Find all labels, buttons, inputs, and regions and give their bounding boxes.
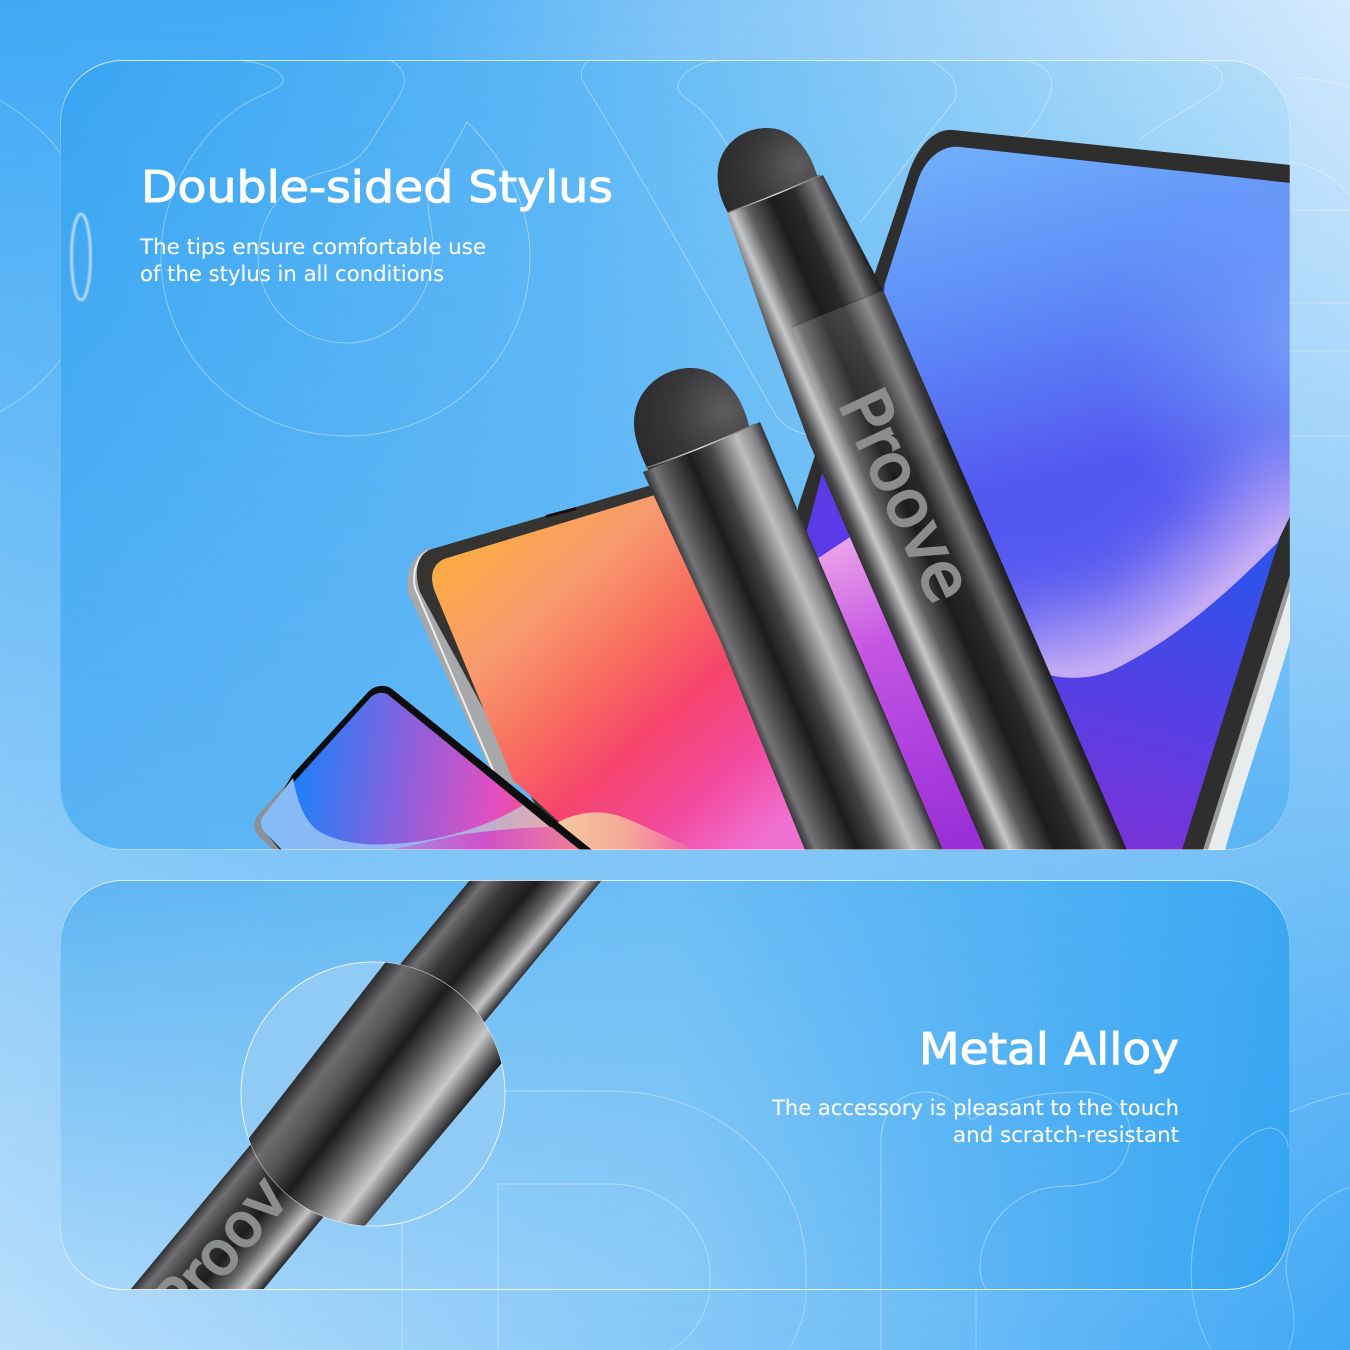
panel 1 background bbox=[60, 60, 1290, 850]
heading: metal alloy: Metal Alloy bbox=[919, 1024, 1179, 1075]
phone silver highlight bbox=[414, 551, 498, 782]
tablet silver edge bbox=[1203, 570, 1290, 850]
magnified shaft bbox=[180, 892, 590, 1303]
stylus front rim bbox=[729, 175, 820, 212]
description: accessory: and scratch-resistant bbox=[953, 1123, 1179, 1148]
small phone lower stripe bbox=[387, 827, 586, 850]
stylus rear tip bbox=[634, 368, 749, 470]
tablet screen left purple bbox=[806, 472, 850, 558]
phone screen bbox=[432, 495, 815, 850]
magnifier lens bbox=[180, 892, 590, 1303]
stylus rear body bbox=[643, 422, 943, 850]
lens glass bbox=[241, 962, 505, 1226]
shaft bbox=[130, 880, 602, 1290]
tablet frame bbox=[780, 130, 1290, 850]
small phone right bezel bbox=[386, 690, 592, 850]
phone frame bbox=[416, 486, 654, 822]
small phone grey rim bbox=[254, 780, 289, 850]
description: tips bbox=[139, 235, 486, 287]
tablet screen upper bbox=[884, 146, 1290, 678]
stylus: diagonal shaft bbox=[130, 880, 602, 1337]
description: tips: The tips ensure comfortable use bbox=[139, 235, 486, 260]
tablet magenta wave bbox=[818, 537, 985, 850]
phone peach wave bbox=[555, 812, 695, 850]
description: accessory: The accessory is pleasant to the touch bbox=[771, 1096, 1179, 1121]
stylus logo: Proove bbox=[823, 377, 988, 613]
stylus front tip bbox=[718, 128, 830, 235]
heading: double-sided stylus: Double-sided Stylus bbox=[141, 162, 613, 213]
phone silver edge bbox=[407, 548, 525, 790]
panel 2 background bbox=[60, 880, 1290, 1290]
phone bbox=[407, 484, 830, 850]
panel 1 border bbox=[60, 60, 1290, 850]
panel: metal alloy bbox=[60, 880, 1290, 1337]
shaft logo: Proove bbox=[141, 1135, 326, 1337]
small phone wave bbox=[261, 778, 578, 850]
panel 1 outline letters bbox=[0, 60, 1223, 436]
product imagery bbox=[254, 128, 1330, 850]
tablet screen lower bbox=[790, 147, 1290, 850]
panel 2 outline letters bbox=[402, 1091, 1288, 1290]
small phone frame bbox=[262, 686, 592, 850]
panel 2 border bbox=[60, 880, 1290, 1290]
stylus rear rim bbox=[646, 424, 755, 468]
stylus front seam bbox=[792, 290, 883, 327]
tablet grey edge line bbox=[1203, 570, 1290, 850]
stylus front upper sheen bbox=[792, 290, 945, 500]
lens ring highlight bbox=[72, 214, 90, 300]
description: tips: of the stylus in all conditions bbox=[140, 262, 444, 287]
stylus front bbox=[718, 128, 1127, 850]
panel: double-sided stylus bbox=[0, 60, 1330, 850]
small phone screen bbox=[261, 693, 578, 850]
small phone bbox=[254, 686, 592, 850]
description: accessory bbox=[771, 1096, 1179, 1148]
tablet bbox=[798, 130, 1290, 850]
phone notch bbox=[545, 507, 577, 518]
stylus front body bbox=[727, 175, 1127, 850]
stylus rear bbox=[634, 368, 943, 850]
